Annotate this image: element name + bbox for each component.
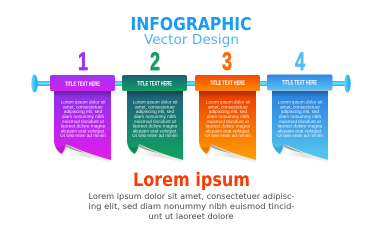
description text: ing elit, sed diam nonummy nibh euismod tincid- xyxy=(88,202,295,211)
fold shade 1 xyxy=(56,146,64,154)
body text 3: aliquam erat volutpat. xyxy=(206,128,250,133)
ribbon body 2 xyxy=(127,91,183,160)
header shadow 2 xyxy=(127,91,183,98)
body text 2: laoreet dolore magna xyxy=(133,124,178,129)
body text 1: laoreet dolore magna xyxy=(61,124,106,129)
curl edge shadow 3 xyxy=(211,144,231,153)
heading: Lorem ipsum: Lorem ipsum xyxy=(133,169,250,191)
description text: Lorem ipsum dolor sit amet, consectetuer adipisc- xyxy=(88,192,295,201)
curl edge shadow 4 xyxy=(284,144,304,153)
body text 3: diam nonummy nibh xyxy=(207,114,249,119)
body text 2: aliquam erat volutpat. xyxy=(133,128,177,133)
body text 2: diam nonummy nibh xyxy=(134,114,176,119)
title: INFOGRAPHIC xyxy=(130,14,252,35)
body text 2 xyxy=(132,100,178,138)
body text 4: amet, consectetuer xyxy=(280,104,320,109)
panel: step 2 xyxy=(122,47,187,163)
body text 4: laoreet dolore magna xyxy=(278,124,323,129)
body text 4: Lorem ipsum dolor sit xyxy=(278,100,323,105)
body text 3: euismod tincidunt ut xyxy=(207,119,250,124)
fold shade 3 xyxy=(201,146,209,154)
body text 1 xyxy=(60,100,106,138)
header 1 xyxy=(50,75,115,91)
body text 3: adipiscing elit, sed xyxy=(209,109,248,114)
page curl 1 xyxy=(62,143,111,162)
body text 4: adipiscing elit, sed xyxy=(281,109,320,114)
body text 1: amet, consectetuer xyxy=(63,104,103,109)
panel: step 1 xyxy=(50,47,115,163)
header 4 xyxy=(267,74,332,90)
ribbon body 1 xyxy=(54,91,111,160)
page curl 2 xyxy=(134,143,183,162)
body text 2: euismod tincidunt ut xyxy=(134,119,177,124)
body text 2: amet, consectetuer xyxy=(135,104,175,109)
fold shade 2 xyxy=(129,146,137,154)
body text 4: euismod tincidunt ut xyxy=(279,119,322,124)
panel: step 4 xyxy=(267,47,332,163)
body text 2: Ut wisi enim ad minim xyxy=(132,133,178,138)
body text 1: adipiscing elit, sed xyxy=(64,109,103,114)
header shadow 3 xyxy=(199,91,256,98)
header shadow 1 xyxy=(54,91,111,98)
header title 1: TITLE TEXT HERE xyxy=(65,81,100,88)
body text 2: Lorem ipsum dolor sit xyxy=(133,100,178,105)
curl edge shadow 1 xyxy=(66,144,86,153)
horizontal rod with end caps xyxy=(31,74,351,92)
fold shade 4 xyxy=(274,146,282,154)
number 2: 2 xyxy=(150,47,160,76)
panel: step 3 xyxy=(195,47,260,163)
header 2 xyxy=(122,75,187,91)
page curl 4 xyxy=(280,143,328,162)
subtitle: Vector Design xyxy=(144,33,239,48)
number 4: 4 xyxy=(295,47,305,76)
ribbon body 4 xyxy=(272,91,328,160)
ribbon body 3 xyxy=(199,91,256,160)
body text 4: Ut wisi enim ad minim xyxy=(277,133,323,138)
description text xyxy=(88,192,295,221)
description text: unt ut laoreet dolore xyxy=(148,212,234,221)
body text 3: amet, consectetuer xyxy=(208,104,248,109)
header title 2: TITLE TEXT HERE xyxy=(137,80,172,87)
body text 1: Ut wisi enim ad minim xyxy=(60,133,106,138)
body text 1: diam nonummy nibh xyxy=(62,114,104,119)
body text 4: diam nonummy nibh xyxy=(279,114,321,119)
header title 4: TITLE TEXT HERE xyxy=(282,79,317,86)
body text 4 xyxy=(277,100,323,138)
body text 4: aliquam erat volutpat. xyxy=(278,128,322,133)
header 3 xyxy=(195,75,260,91)
number 1: 1 xyxy=(78,47,88,76)
body text 1: aliquam erat volutpat. xyxy=(61,128,105,133)
body text 2: adipiscing elit, sed xyxy=(136,109,175,114)
body text 1: Lorem ipsum dolor sit xyxy=(61,100,106,105)
body text 3 xyxy=(205,100,251,138)
body text 3: Ut wisi enim ad minim xyxy=(205,133,251,138)
body text 3: Lorem ipsum dolor sit xyxy=(206,100,251,105)
body text 1: euismod tincidunt ut xyxy=(62,119,105,124)
number 3: 3 xyxy=(222,47,232,76)
header shadow 4 xyxy=(272,90,328,97)
page curl 3 xyxy=(206,143,256,162)
curl edge shadow 2 xyxy=(139,144,159,153)
header title 3: TITLE TEXT HERE xyxy=(210,80,245,87)
body text 3: laoreet dolore magna xyxy=(206,124,251,129)
